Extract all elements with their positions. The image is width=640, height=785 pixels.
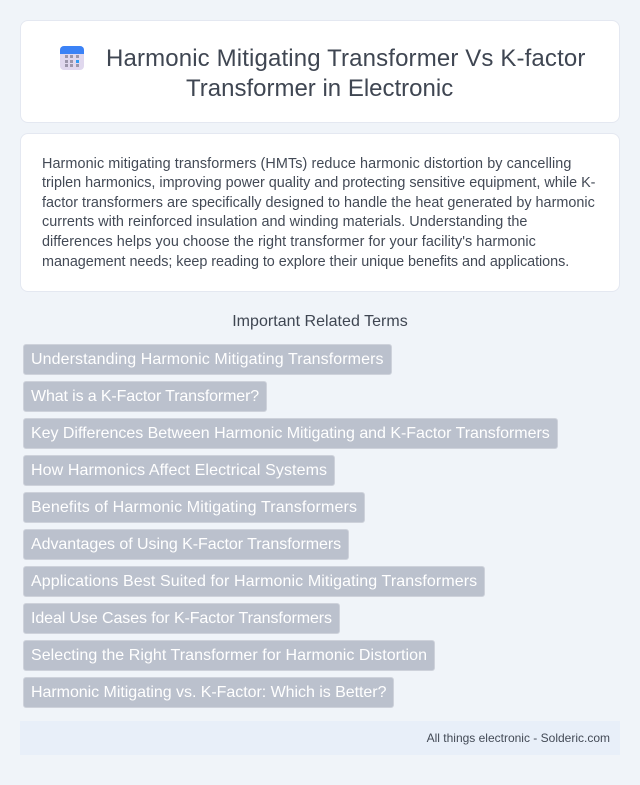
title: Harmonic Mitigating Transformer Vs K-factor bbox=[106, 45, 586, 72]
chip: term 3 bbox=[23, 418, 558, 449]
chip: term 2 bbox=[23, 381, 267, 412]
chip: term 4: How Harmonics Affect Electrical Systems bbox=[31, 462, 327, 479]
chip: term 6 bbox=[23, 529, 349, 560]
chip: term 7: Applications Best Suited for Harmonic Mitigating Transformers bbox=[31, 573, 477, 590]
title bbox=[106, 45, 586, 102]
panel: intro text card bbox=[20, 133, 620, 292]
text block: introduction: factor transformers are specifically designed to handle the heat generated by harmonic bbox=[42, 195, 595, 211]
panel: title card bbox=[20, 20, 620, 123]
chip: term 7 bbox=[23, 566, 485, 597]
footer text: All things electronic - Solderic.com bbox=[427, 731, 610, 745]
chip: term 10: Harmonic Mitigating vs. K-Factor: Which is Better? bbox=[31, 684, 386, 701]
footer bar bbox=[20, 721, 620, 755]
text block: introduction: management needs; keep reading to explore their unique benefits and applications. bbox=[42, 254, 569, 270]
text block: introduction: currents with reinforced insulation and winding materials. Understanding the bbox=[42, 214, 527, 230]
chip: term 8: Ideal Use Cases for K-Factor Transformers bbox=[31, 610, 332, 627]
chip: term 5: Benefits of Harmonic Mitigating Transformers bbox=[31, 499, 357, 516]
chip: term 9 bbox=[23, 640, 435, 671]
text block: introduction: Harmonic mitigating transformers (HMTs) reduce harmonic distortion by cancelling bbox=[42, 156, 571, 172]
list: related term chips bbox=[23, 344, 558, 708]
chip: term 4 bbox=[23, 455, 335, 486]
title: Transformer in Electronic bbox=[186, 75, 453, 102]
chip: term 5 bbox=[23, 492, 365, 523]
chip: term 1: Understanding Harmonic Mitigating Transformers bbox=[31, 351, 384, 368]
icon: calendar bbox=[60, 46, 84, 70]
chip: term 3: Key Differences Between Harmonic Mitigating and K-Factor Transformers bbox=[31, 425, 550, 442]
heading: related terms: Important Related Terms bbox=[232, 313, 408, 330]
text block: introduction bbox=[42, 156, 595, 270]
chip: term 2: What is a K-Factor Transformer? bbox=[31, 388, 259, 405]
chip: term 6: Advantages of Using K-Factor Transformers bbox=[31, 536, 341, 553]
chip: term 1 bbox=[23, 344, 392, 375]
text block: introduction: triplen harmonics, improving power quality and protecting sensitive equipment, while K- bbox=[42, 175, 595, 191]
chip: term 8 bbox=[23, 603, 340, 634]
chip: term 10 bbox=[23, 677, 394, 708]
text block: introduction: differences helps you choose the right transformer for your facility's harmonic bbox=[42, 234, 536, 250]
chip: term 9: Selecting the Right Transformer for Harmonic Distortion bbox=[31, 647, 427, 664]
